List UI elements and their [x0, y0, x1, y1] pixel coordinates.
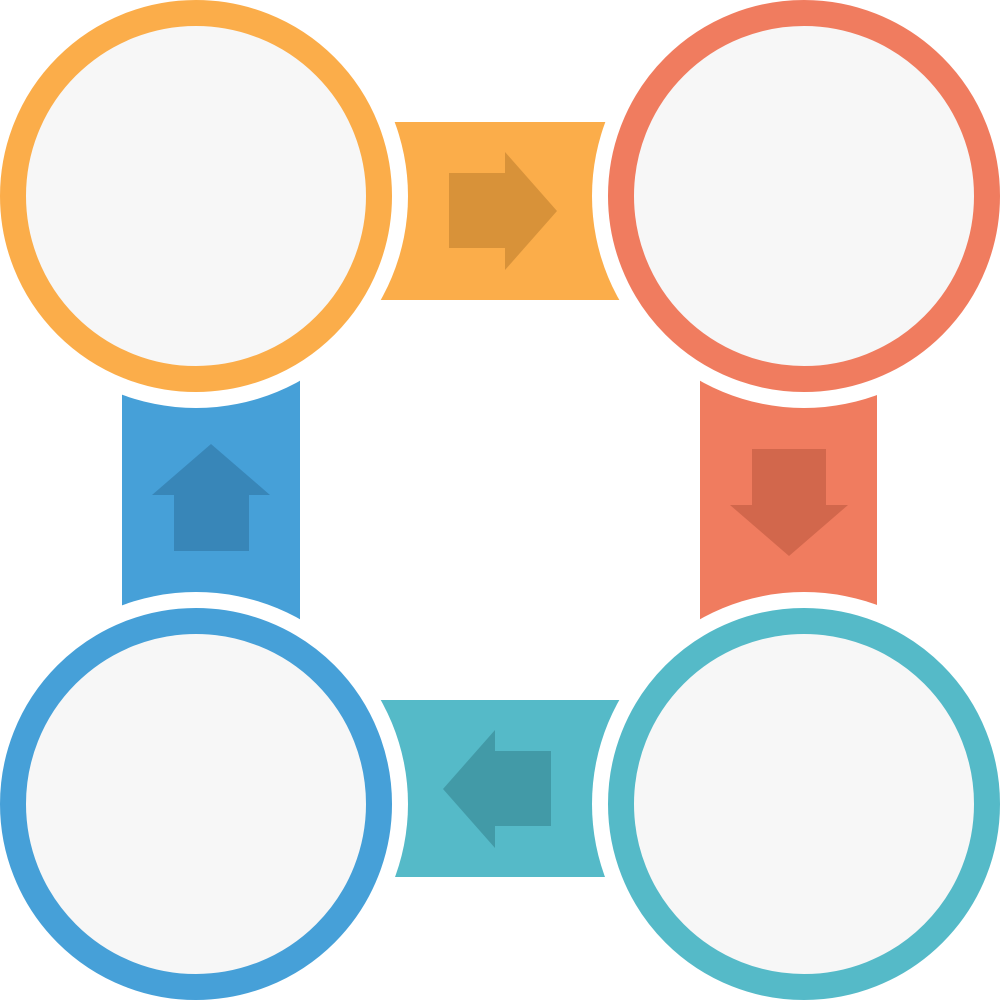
- arrow: down (right band): [730, 449, 848, 556]
- connector: top orange band: [300, 122, 700, 300]
- arrow: right (top band): [449, 152, 557, 270]
- arrow: up (left band): [152, 444, 270, 551]
- connector: bottom teal band: [300, 700, 700, 877]
- circle: bottom-right teal: [621, 621, 987, 987]
- circle: top-right red: [621, 13, 987, 379]
- circle: bottom-left blue: [13, 621, 379, 987]
- circle: top-left orange: [13, 13, 379, 379]
- arrow: left (bottom band): [443, 730, 551, 848]
- connector: right red band: [700, 300, 877, 700]
- connector: left blue band: [122, 300, 300, 700]
